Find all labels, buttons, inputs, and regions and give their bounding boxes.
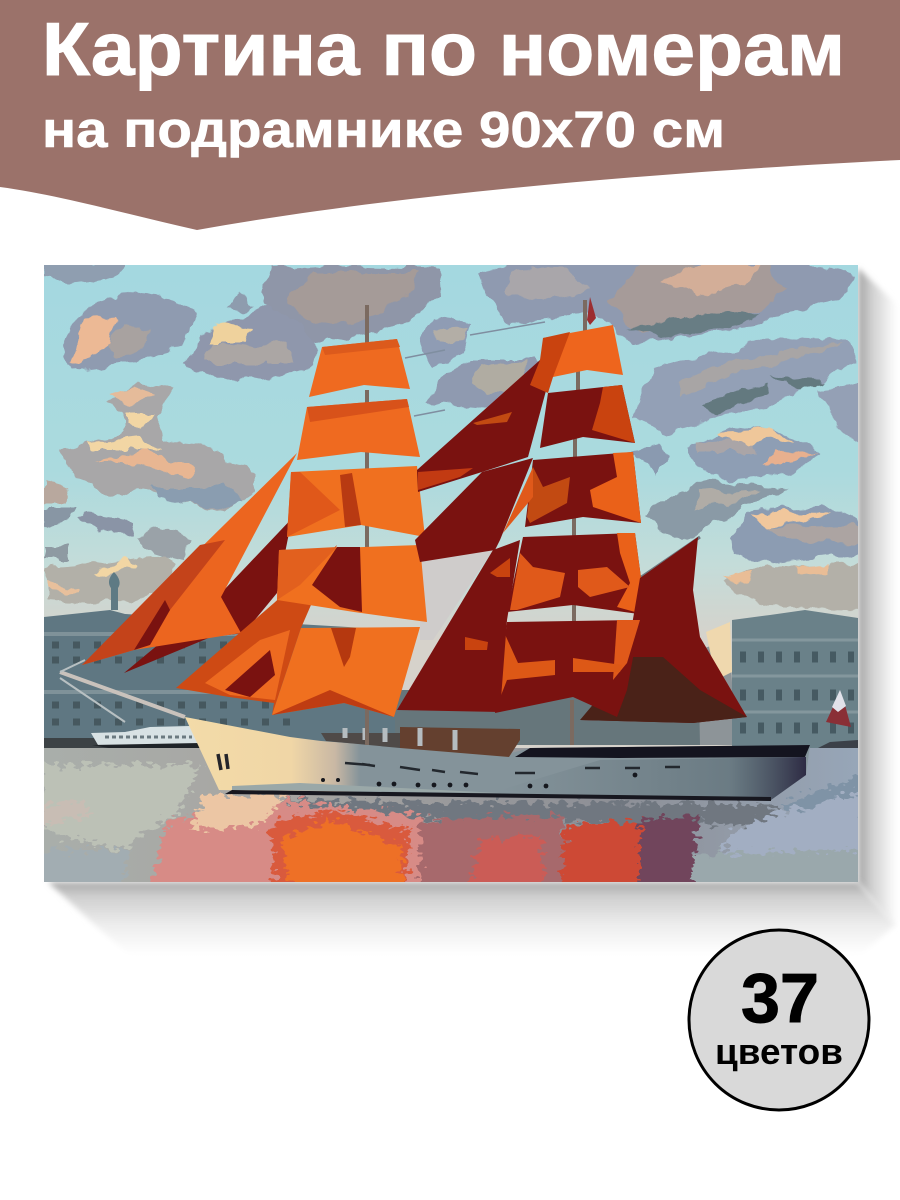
tour boat bbox=[91, 726, 200, 745]
orange sails: fore mast bbox=[272, 339, 427, 717]
title: Картина по номерам bbox=[42, 7, 845, 91]
canvas drop shadow bbox=[48, 268, 897, 955]
water bbox=[40, 748, 862, 890]
city buildings bbox=[44, 572, 858, 757]
sail shading bbox=[322, 339, 400, 355]
jib sails bbox=[82, 453, 337, 715]
grey sky between main sails bbox=[420, 550, 492, 624]
painting: scarlet sails ship bbox=[40, 262, 862, 890]
dark red sails: main mast bbox=[397, 325, 747, 723]
clouds bbox=[44, 262, 862, 610]
portholes bbox=[321, 773, 637, 788]
flag on mast bbox=[587, 297, 596, 325]
dome bbox=[109, 572, 120, 610]
label: цветов bbox=[715, 1031, 843, 1072]
flag on embankment bbox=[826, 690, 851, 727]
number: 37 bbox=[741, 959, 819, 1037]
subtitle: на подрамнике 90х70 см bbox=[42, 101, 725, 158]
header banner bbox=[0, 0, 900, 230]
thin rigging lines in sky bbox=[405, 322, 545, 416]
rigging and masts bbox=[60, 300, 700, 745]
colour count badge bbox=[689, 930, 869, 1110]
ship hull bbox=[185, 717, 810, 801]
